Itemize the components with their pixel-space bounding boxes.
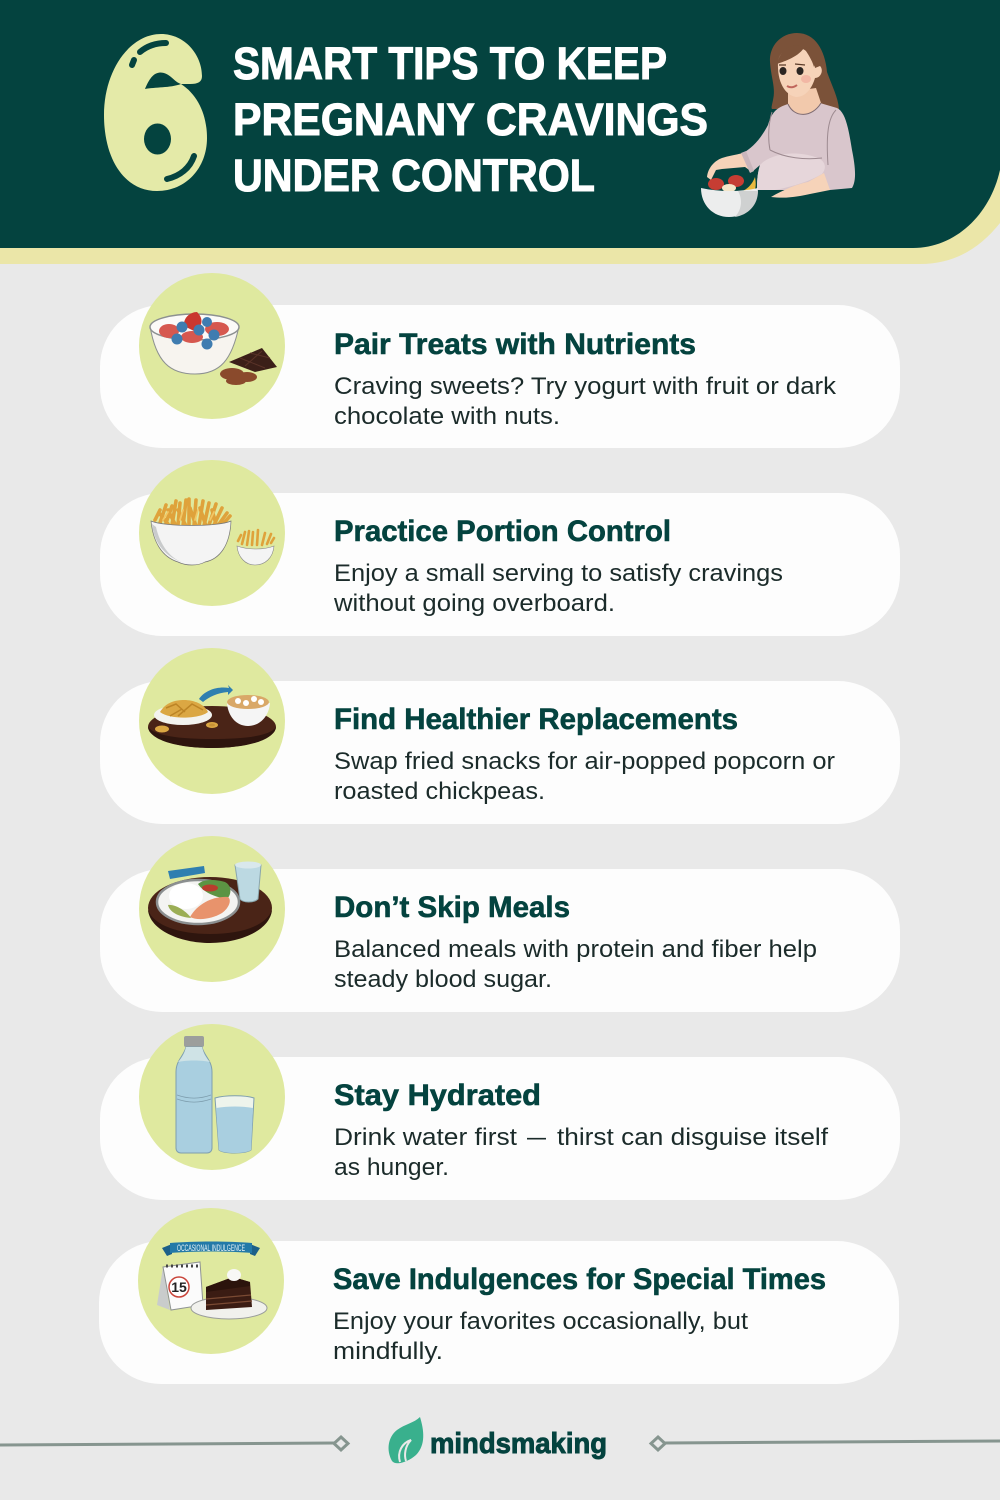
icon: water bottle and glass <box>139 1024 285 1170</box>
body text <box>333 1308 748 1365</box>
heading: Stay Hydrated <box>334 1079 541 1112</box>
title: SMART TIPS TO KEEP <box>233 38 667 89</box>
heading: Find Healthier Replacements <box>334 703 738 736</box>
icon: chips swapped for popcorn on a table <box>139 648 285 794</box>
heading: Pair Treats with Nutrients <box>334 328 696 361</box>
icon: yogurt bowl with chocolate <box>139 273 285 419</box>
body text <box>334 748 835 805</box>
body text: chocolate with nuts. <box>334 403 560 430</box>
logo: mindsmaking <box>389 1417 607 1463</box>
icon: leaf <box>389 1417 423 1463</box>
big number 6 <box>104 34 207 191</box>
body text: without going overboard. <box>333 590 615 617</box>
panel: stay hydrated <box>100 1024 900 1200</box>
body text: — <box>527 1124 546 1151</box>
body text: Balanced meals with protein and fiber help <box>334 936 817 963</box>
heading: Save Indulgences for Special Times <box>333 1263 826 1296</box>
heading: Don’t Skip Meals <box>334 891 570 924</box>
body text <box>334 373 837 430</box>
footer right connector <box>651 1437 1000 1450</box>
panel: save indulgences <box>99 1208 899 1384</box>
body text <box>333 560 783 617</box>
body text: thirst can disguise itself <box>557 1124 828 1151</box>
header banner <box>0 0 1000 264</box>
title <box>233 38 708 201</box>
body text: mindfully. <box>333 1338 443 1365</box>
body text: Enjoy your favorites occasionally, but <box>333 1308 748 1335</box>
footer left connector <box>0 1437 348 1450</box>
icon: balanced meal plate and water <box>139 836 285 982</box>
icon: calendar and chocolate cake <box>138 1208 284 1354</box>
icon: pregnant woman with fruit bowl <box>701 33 855 217</box>
body text: Craving sweets? Try yogurt with fruit or dark <box>334 373 837 400</box>
body text: Enjoy a small serving to satisfy cravings <box>334 560 783 587</box>
body text: Swap fried snacks for air-popped popcorn or <box>334 748 835 775</box>
body text: as hunger. <box>334 1154 449 1181</box>
icon: calendar and chocolate cake: 15 <box>171 1279 187 1295</box>
heading: Practice Portion Control <box>334 515 671 548</box>
icon: large and small bowls of snacks <box>139 460 285 606</box>
body text: Drink water first <box>334 1124 517 1151</box>
body text: steady blood sugar. <box>334 966 552 993</box>
body text <box>334 1124 828 1181</box>
body text: roasted chickpeas. <box>334 778 545 805</box>
title: UNDER CONTROL <box>233 150 595 201</box>
wordmark: mindsmaking <box>430 1428 607 1460</box>
icon: calendar and chocolate cake: OCCASIONAL INDULGENCE <box>177 1243 245 1253</box>
panel: find healthier replacements <box>100 648 900 824</box>
panel: practice portion control <box>100 460 900 636</box>
panel: don't skip meals <box>100 836 900 1012</box>
title: PREGNANY CRAVINGS <box>233 94 708 145</box>
panel: pair treats with nutrients <box>100 273 900 448</box>
body text <box>334 936 817 993</box>
